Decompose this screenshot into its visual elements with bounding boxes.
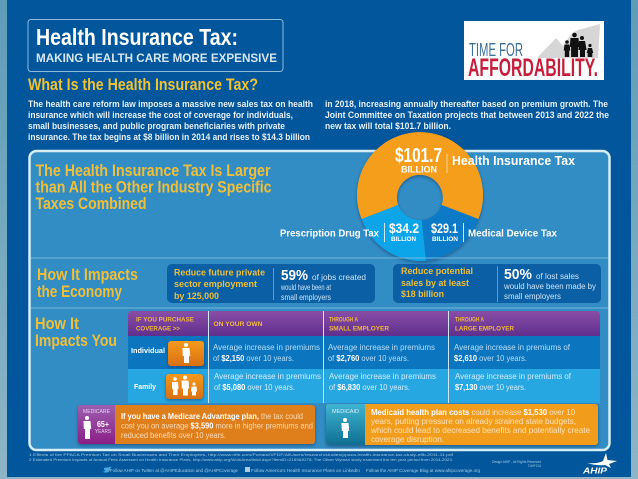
table header: THROUGH A — [455, 316, 484, 324]
stat box: potential sales: of lost sales — [536, 272, 579, 281]
stat box: potential sales: Reduce potential — [401, 266, 473, 276]
intro text right column — [325, 99, 609, 131]
table header: COVERAGE >> — [136, 326, 180, 332]
row: individual: $2,610 over 10 years. — [454, 354, 527, 363]
main panel — [30, 151, 610, 450]
social links footer — [102, 466, 481, 473]
row: individual: of $2,150 over 10 years. — [213, 354, 294, 363]
row: family: Average increase in premiums — [214, 372, 321, 381]
AHIP logo — [582, 453, 617, 476]
row: individual: Individual — [131, 346, 165, 355]
table header: IF YOU PURCHASE — [136, 316, 195, 324]
heading: how it impacts the economy: the Economy — [37, 282, 122, 301]
copyright — [492, 460, 541, 468]
donut label: prescription drug tax — [280, 220, 419, 243]
intro text right column: in 2018, increasing annually thereafter based on premium growth. The — [325, 99, 608, 109]
social links footer: Follow America's Health Insurance Plans on LinkedIn — [251, 468, 361, 473]
medicaid badge — [326, 404, 365, 445]
medicaid badge: MEDICAID — [332, 409, 359, 415]
row: family: Average increase in premiums of — [455, 372, 572, 381]
stat box: private sector employment: 59% — [281, 267, 308, 284]
stat box: private sector employment: small employers — [281, 293, 331, 302]
panel heading: larger than other taxes: than All the Other Industry Specific — [36, 178, 272, 196]
table header — [128, 311, 600, 336]
logo text: TIME FOR — [469, 40, 523, 60]
table header: ON YOUR OWN — [214, 321, 263, 328]
stat box: private sector employment: by 125,000 — [174, 291, 219, 301]
intro text right column: Joint Committee on Taxation projects that between 2013 and 2022 the — [325, 110, 609, 120]
row: family: $7,130 over 10 years. — [455, 383, 526, 392]
intro text left column: The health care reform law imposes a massive new sales tax on health — [28, 99, 313, 109]
heading: what is the tax: What Is the Health Insurance Tax? — [28, 75, 258, 94]
row: family — [128, 369, 600, 403]
callout: medicaid: years, putting pressure on already strained state budgets, — [371, 416, 576, 426]
logo: time for affordability — [464, 21, 604, 82]
donut label: prescription drug tax: Prescription Drug Tax — [280, 228, 379, 240]
donut label: prescription drug tax: BILLION — [391, 236, 416, 243]
donut label: health insurance tax — [395, 145, 575, 174]
heading: how it impacts you: How It — [35, 315, 79, 333]
donut label: health insurance tax: Health Insurance Tax — [452, 154, 575, 168]
donut label: prescription drug tax: $34.2 — [389, 220, 419, 236]
row: individual: Average increase in premiums — [328, 343, 435, 352]
icon: twitter — [102, 466, 112, 473]
row: family: Average increase in premiums — [329, 372, 436, 381]
donut label: medical device tax: Medical Device Tax — [468, 228, 557, 240]
row: family: of $6,830 over 10 years. — [329, 383, 410, 392]
row: family: Family — [134, 382, 157, 391]
icon: family — [166, 374, 203, 399]
intro text left column: insurance which will increase the cost of coverage for individuals, — [28, 110, 293, 120]
heading: how it impacts you: Impacts You — [35, 332, 117, 350]
copyright: © AHIP 2014 — [528, 464, 541, 468]
stat box: potential sales: would have been made by — [503, 282, 596, 291]
callout: medicare advantage — [78, 405, 315, 444]
table header: THROUGH A — [329, 316, 358, 324]
heading: how it impacts you — [35, 315, 117, 350]
intro text left column: small businesses, and public program beneficiaries with private — [28, 121, 285, 131]
stat box: private sector employment: sector employment — [174, 279, 257, 289]
callout: medicare advantage: If you have a Medicare Advantage plan, the tax could — [121, 411, 303, 421]
table header: SMALL EMPLOYER — [329, 326, 389, 332]
table header: LARGE EMPLOYER — [455, 326, 514, 332]
intro text left column: insurance. The tax begins at $8 billion in 2014 and rises to $14.3 billion — [28, 132, 310, 142]
stat box: potential sales — [393, 264, 601, 303]
icon: individual — [168, 341, 204, 366]
heading: how it impacts the economy: How It Impacts — [37, 265, 138, 284]
stat box: potential sales: sales by at least — [401, 278, 469, 288]
logo people — [564, 33, 593, 57]
stat box: private sector employment: would have been at — [280, 283, 332, 292]
title: Health Insurance Tax: — [36, 24, 238, 50]
callout: medicaid: which could lead to decreased benefits and potentially create — [370, 425, 590, 435]
panel heading: larger than other taxes: Taxes Combined — [36, 194, 146, 213]
callout: medicare advantage: cost you on average $3,590 more in higher premiums and — [121, 420, 313, 430]
copyright: Design AHIP - All Rights Reserved — [492, 460, 541, 464]
footnotes — [29, 452, 454, 462]
donut label: medical device tax: BILLION — [432, 236, 458, 243]
callout: medicaid: coverage disruption. — [371, 434, 444, 444]
donut label: medical device tax — [431, 220, 557, 243]
stat box: potential sales: 50% — [504, 266, 532, 283]
row: individual — [128, 336, 600, 369]
social links footer: Follow the AHIP Coverage Blog at www.ahipcoverage.org — [366, 468, 481, 473]
footnotes: 2 Estimated Premium Impacts of Annual Fees Assessed on Health Insurance Plans, http://www.ahip.org/WorkArea/linkit.aspx?ItemID=2169&9278; The Oliver Wyman study examined the ten year period from 2014-2023. — [29, 457, 453, 462]
callout: medicare advantage: reduced benefits over 10 years. — [121, 430, 226, 440]
icon: linkedin — [245, 467, 250, 472]
callout: medicaid — [326, 404, 598, 445]
medicare badge: 65+ — [97, 419, 109, 429]
footnotes: 1 Effects of the PPACA Premium Tax on Small Businesses and Their Employees, http://www.nfib.com/Portals/0/PDF/AllUsers/research/studies/ppaca-health-insurance-tax-study-nfib-2011-11.pdf — [29, 452, 454, 457]
medicare badge: YEARS — [95, 429, 112, 435]
row: individual: of $2,760 over 10 years. — [328, 354, 409, 363]
callout: medicaid: Medicaid health plan costs could increase $1,530 over 10 — [371, 407, 575, 417]
donut chart — [357, 132, 483, 261]
title box — [28, 20, 283, 72]
stat box: private sector employment: Reduce future private — [174, 268, 265, 278]
donut label: medical device tax: $29.1 — [431, 220, 458, 236]
stat box: potential sales: $18 billion — [401, 289, 444, 299]
coverage table — [128, 311, 600, 403]
AHIP logo: AHIP — [582, 466, 607, 476]
stat box: private sector employment: of jobs created — [312, 273, 366, 282]
subtitle: MAKING HEALTH CARE MORE EXPENSIVE — [36, 51, 277, 65]
donut label: health insurance tax: $101.7 — [395, 145, 442, 167]
row: family: of $5,080 over 10 years. — [214, 383, 295, 392]
logo bars — [537, 24, 600, 58]
panel heading: larger than other taxes: The Health Insurance Tax Is Larger — [36, 161, 271, 180]
stat box: private sector employment — [167, 264, 375, 303]
intro text left column — [28, 99, 313, 142]
intro text right column: new tax will total $101.7 billion. — [325, 121, 451, 131]
stat box: potential sales: small employers — [504, 292, 561, 301]
row: individual: Average increase in premiums of — [454, 343, 571, 352]
row: individual: Average increase in premiums — [213, 343, 320, 352]
medicare badge — [78, 405, 115, 444]
donut label: health insurance tax: BILLION — [401, 164, 437, 174]
heading: how it impacts the economy — [37, 265, 138, 301]
panel heading: larger than other taxes — [36, 161, 272, 213]
social links footer: Follow AHIP on Twitter at @AHIPEducation and @AHIPCoverage — [110, 468, 239, 473]
medicare badge: MEDICARE — [83, 409, 110, 415]
